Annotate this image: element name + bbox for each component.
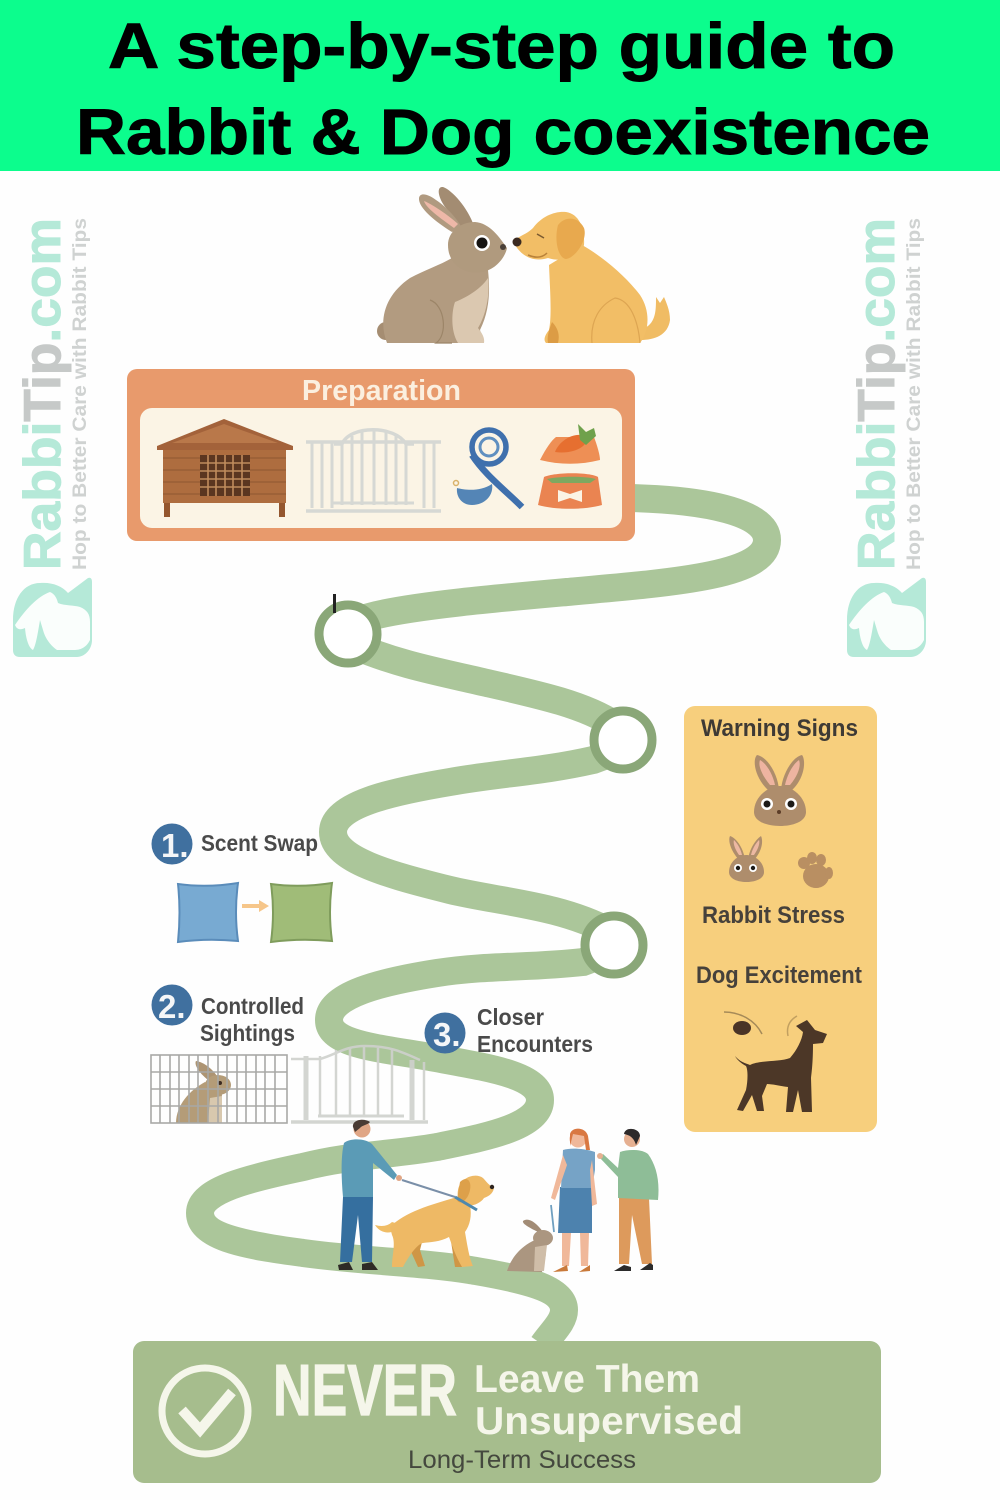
icon: rabbit in cage <box>151 1055 287 1123</box>
watermark: left <box>13 218 92 657</box>
watermark: left: Hop to Better Care with Rabbit Tips <box>70 218 91 570</box>
path waypoint 1 <box>319 605 377 663</box>
badge: 1 <box>152 824 192 864</box>
illustration: rabbit and dog greeting <box>377 187 670 343</box>
icon: stressed rabbit face <box>754 755 806 826</box>
icon: dog silhouette <box>735 1020 827 1112</box>
step 2: controlled sightings <box>151 984 428 1123</box>
icon: leash <box>454 430 522 507</box>
arrow: swap <box>242 900 269 912</box>
label: scent swap: Scent Swap <box>201 830 318 856</box>
panel: never leave them unsupervised <box>133 1341 881 1483</box>
icon: blue blanket <box>178 883 238 942</box>
label: rabbit stress: Rabbit Stress <box>702 902 845 929</box>
label: controlled sightings: Sightings <box>200 1020 295 1046</box>
label: closer encounters: Encounters <box>477 1031 593 1057</box>
text cursor mark <box>333 594 336 613</box>
person: man in green <box>597 1129 659 1271</box>
step 3: closer encounters <box>424 1004 593 1057</box>
badge: 2: 2. <box>158 988 186 1025</box>
badge: 1: 1. <box>161 827 189 864</box>
watermark: right: RabbiTip.com <box>848 218 906 570</box>
text: leave them unsupervised <box>474 1358 743 1443</box>
label: controlled sightings <box>200 993 304 1046</box>
person: woman <box>551 1129 597 1272</box>
title banner: Rabbit & Dog coexistence <box>76 96 930 168</box>
panel: warning signs <box>684 706 877 1132</box>
step 1: scent swap <box>152 824 332 942</box>
watermark: right <box>847 218 926 657</box>
icon: dog <box>512 212 670 343</box>
icon: green blanket <box>271 883 332 942</box>
icon: safety gate <box>306 430 441 511</box>
label: dog excitement: Dog Excitement <box>696 962 862 989</box>
text: long-term success: Long-Term Success <box>408 1446 636 1474</box>
title banner <box>0 0 1000 171</box>
animal: golden dog on leash <box>375 1176 494 1267</box>
label: controlled sightings: Controlled <box>201 993 304 1019</box>
icon: rabbit <box>377 187 507 343</box>
badge: 2 <box>152 984 192 1026</box>
text: never: NEVER <box>273 1351 457 1431</box>
label: closer encounters <box>477 1004 593 1057</box>
panel: preparation <box>127 369 635 541</box>
icon: gate <box>291 1046 428 1122</box>
icon: small rabbit face <box>729 836 764 882</box>
icon: check circle <box>162 1368 248 1454</box>
watermark: left: RabbiTip.com <box>14 218 72 570</box>
winding path <box>200 498 767 1345</box>
text: leave them unsupervised: Unsupervised <box>475 1400 743 1443</box>
path waypoint 2 <box>594 711 652 769</box>
person: man with leash <box>338 1120 455 1270</box>
text: leave them unsupervised: Leave Them <box>474 1358 700 1401</box>
icon: paw print <box>798 852 833 888</box>
icon: wooden hutch <box>157 419 293 517</box>
title banner: A step-by-step guide to <box>108 10 895 82</box>
illustration: supervised meeting <box>338 1120 659 1272</box>
watermark: right: Hop to Better Care with Rabbit Tips <box>904 218 925 570</box>
animal: small rabbit <box>507 1220 553 1272</box>
path waypoint 3 <box>585 916 643 974</box>
badge: 3 <box>424 1012 466 1054</box>
label: closer encounters: Closer <box>477 1004 544 1030</box>
icon: carrot bowl <box>540 424 600 464</box>
icon: dog bowl <box>538 473 602 509</box>
heading: warning signs: Warning Signs <box>701 715 858 742</box>
icon: alert dog eye <box>724 1012 797 1036</box>
heading: preparation: Preparation <box>302 375 461 407</box>
badge: 3: 3. <box>433 1016 461 1053</box>
